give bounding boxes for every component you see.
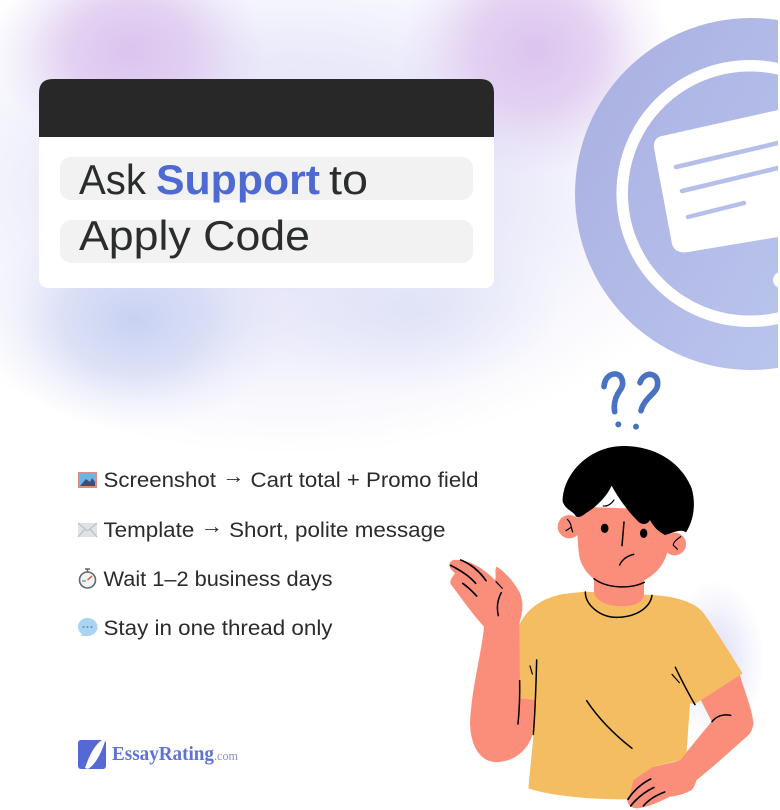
- heading: Ask: [79, 156, 147, 203]
- heading: Support: [156, 156, 320, 203]
- item: wait: Wait 1–2 business days: [104, 568, 332, 591]
- item: screenshot: Cart total + Promo field: [244, 469, 478, 492]
- logo: EssayRating.com: EssayRating: [112, 743, 214, 765]
- icon: envelope: [78, 523, 97, 537]
- item: screenshot: Screenshot: [104, 469, 210, 492]
- raised arm and hand: [449, 560, 535, 762]
- title card: [39, 79, 494, 288]
- item: template: →: [201, 515, 223, 538]
- item: screenshot: [78, 465, 478, 492]
- hair: [563, 446, 694, 535]
- lowered arm and hand: [627, 670, 753, 808]
- shirt: [518, 592, 743, 799]
- icon: speech bubble: [78, 618, 98, 636]
- note card: [654, 110, 778, 252]
- face and body line details: [451, 500, 731, 806]
- title line backgrounds: [60, 157, 473, 200]
- item: thread: Stay in one thread only: [104, 617, 333, 640]
- white ring: [622, 66, 780, 321]
- note card lines: [676, 143, 778, 217]
- heading: Apply Code: [79, 212, 310, 259]
- face: [577, 507, 671, 587]
- item: template: Short, polite message: [223, 519, 446, 542]
- eyes: [601, 524, 647, 538]
- question marks: [604, 374, 658, 412]
- item: template: [78, 515, 446, 542]
- small white dot at the edge: [773, 272, 778, 288]
- heading: [79, 156, 368, 259]
- illustration: confused person: [449, 374, 753, 808]
- question mark dots: [615, 421, 639, 430]
- icon: quill square: [78, 738, 106, 769]
- item: template: Template: [104, 519, 189, 542]
- heading: to: [329, 156, 368, 203]
- decorative disc with note card: [575, 18, 780, 370]
- neck: [594, 573, 644, 606]
- icon: stopwatch: [80, 569, 96, 588]
- logo: EssayRating.com: [78, 738, 238, 769]
- logo: EssayRating.com: .com: [214, 749, 238, 763]
- item: screenshot: →: [222, 465, 244, 488]
- icon: framed picture: [78, 472, 97, 488]
- ears: [558, 515, 581, 538]
- checklist: [78, 465, 478, 640]
